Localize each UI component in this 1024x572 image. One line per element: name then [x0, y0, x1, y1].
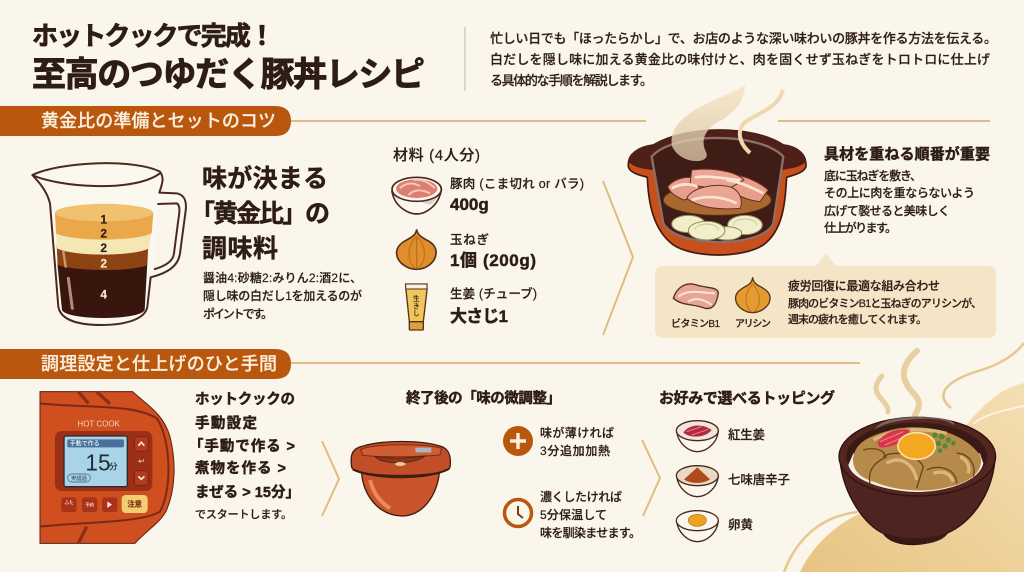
text: manual settings: 煮物を作る >	[195, 459, 286, 477]
heading: golden ratio seasoning: 味が決まる	[202, 164, 328, 193]
icon: pork slice	[673, 284, 718, 309]
text: ratio explanation: 隠し味の白だし1を加えるのが	[203, 288, 362, 303]
intro text: 忙しい日でも「ほったらかし」で、お店のような深い味わいの豚丼を作る方法を伝える。	[490, 31, 997, 46]
icon: measuring jug: 2	[100, 241, 107, 255]
text: pork: 豚肉 (こま切れ or バラ)	[450, 177, 584, 191]
text: onion: 玉ねぎ	[450, 232, 489, 247]
heading: golden ratio seasoning: 調味料	[202, 235, 278, 263]
text: manual settings: ホットクックの	[195, 391, 295, 408]
icon: measuring jug: 2	[100, 256, 107, 270]
icon: ginger tube: し	[413, 310, 420, 318]
text: manual settings: 「手動で作る >	[189, 438, 295, 455]
text: layering explanation: その上に肉を重ならないよう	[824, 185, 975, 200]
icon: hot cook control panel	[40, 392, 174, 543]
text: layering explanation: 広げて褧せると美味しく	[824, 204, 950, 218]
icon: hot cook control panel: HOT COOK	[77, 419, 121, 428]
text: ginger: 大さじ1	[450, 307, 508, 326]
icon: measuring jug: 4	[100, 287, 107, 301]
text: layering explanation: 仕上がります。	[824, 220, 897, 235]
icon: hot cook control panel: 予約	[85, 502, 95, 509]
text: egg yolk: 卵黄	[728, 517, 753, 532]
section heading: golden ratio	[0, 106, 291, 136]
title	[32, 21, 425, 94]
text: keep warm: 濃くしたければ	[540, 490, 622, 504]
icon: hot cook control panel: 分	[109, 461, 118, 471]
icon: hot cook pot	[351, 441, 450, 516]
panel: fatigue recovery callout: 週末の疲れを癒してくれます。	[788, 312, 927, 326]
panel: fatigue recovery callout: 豚肉のビタミンB1と玉ねぎのアリシンが、	[788, 296, 982, 310]
icon: ginger tube: き	[413, 302, 420, 310]
intro text: る具体的な手順を解説します。	[490, 73, 653, 88]
text: pork	[450, 177, 584, 214]
section heading: cooking settings	[0, 349, 291, 379]
text: add heat	[540, 425, 614, 458]
text: ginger: 生姜 (チューブ)	[450, 286, 537, 301]
icon: plus	[503, 426, 533, 456]
text: onion: 1個 (200g)	[450, 251, 536, 270]
icon: egg yolk bowl	[676, 511, 718, 542]
text: manual settings: でスタートします。	[195, 508, 292, 521]
background blob	[784, 343, 1024, 572]
arrow	[322, 441, 339, 516]
intro text: 白だしを隠し味に加える黄金比の味付けと、肉を固くせず玉ねぎをトロトロに仕上げ	[490, 52, 990, 67]
icon: steam over bowl	[876, 351, 919, 415]
arrow	[603, 181, 633, 335]
heading: layering order: 具材を重ねる順番が重要	[824, 145, 990, 163]
panel: fatigue recovery callout	[655, 253, 996, 338]
panel: fatigue recovery callout: アリシン	[735, 318, 771, 330]
icon: measuring jug: 1	[100, 213, 107, 227]
heading: ingredients: 材料 (4人分)	[393, 147, 480, 164]
heading: golden ratio seasoning	[190, 164, 330, 263]
text: ratio explanation: ポイントです。	[203, 307, 273, 321]
arrow	[642, 440, 660, 516]
icon: ginger tube	[406, 284, 427, 330]
text: pork: 400g	[450, 195, 489, 214]
icon: hot cook control panel: 実経過	[71, 474, 88, 482]
text: ratio explanation	[203, 270, 362, 321]
icon: hot cook control panel: 15	[85, 449, 111, 475]
section heading: cooking settings: 調理設定と仕上げのひと手間	[41, 354, 277, 374]
text: layering explanation: 底に玉ねぎを敷き、	[824, 168, 922, 183]
text: manual settings: まぜる > 15分」	[195, 484, 300, 501]
icon: chili bowl	[676, 466, 718, 497]
icon: pork donburi	[839, 417, 996, 545]
icon: onion	[397, 229, 436, 269]
text: manual settings	[189, 391, 300, 521]
heading: golden ratio seasoning: 「黄金比」の	[190, 200, 330, 228]
icon: hot cook control panel: 注意	[127, 500, 143, 509]
text: ginger	[450, 286, 537, 326]
icon: hot cook control panel: ふた	[64, 499, 74, 506]
text: manual settings: 手動設定	[195, 415, 257, 432]
icon: measuring jug	[32, 163, 186, 325]
text: ratio explanation: 醤油4:砂糖2:みりん2:酒2に、	[203, 270, 362, 285]
text: add heat: 味が薄ければ	[540, 425, 614, 440]
section heading: golden ratio: 黄金比の準備とセットのコツ	[41, 111, 276, 131]
icon: cooking pot cross section	[628, 130, 806, 255]
heading: fine tuning: 終了後の「味の微調整」	[406, 389, 561, 407]
text: keep warm	[540, 490, 641, 540]
icon: hot cook control panel: 手動で作る	[70, 440, 100, 448]
icon: hot cook control panel: ↩	[138, 456, 144, 465]
panel: fatigue recovery callout: ビタミンB1	[671, 317, 720, 330]
panel: fatigue recovery callout: 疲労回復に最適な組み合わせ	[788, 278, 940, 293]
text: onion	[450, 232, 536, 270]
title: ホットクックで完成！	[32, 21, 275, 51]
icon: onion small	[736, 277, 770, 313]
text: add heat: 3分追加加熱	[540, 443, 610, 458]
icon: red ginger bowl	[676, 421, 718, 452]
text: keep warm: 味を馴染ませます。	[540, 525, 641, 540]
icon: ginger tube: 生	[413, 294, 420, 303]
icon: pork bowl	[392, 177, 441, 214]
icon: measuring jug: 2	[100, 227, 107, 241]
intro text	[490, 31, 997, 88]
icon: clock	[504, 500, 532, 526]
text: layering explanation	[824, 168, 975, 235]
title: 至高のつゆだく豚丼レシピ	[32, 56, 425, 94]
text: keep warm: 5分保温して	[540, 508, 607, 522]
text: shichimi: 七味唐辛子	[728, 472, 790, 487]
text: red ginger: 紅生姜	[728, 427, 765, 442]
heading: toppings: お好みで選べるトッピング	[659, 389, 835, 407]
icon: steam over pot	[672, 85, 783, 161]
